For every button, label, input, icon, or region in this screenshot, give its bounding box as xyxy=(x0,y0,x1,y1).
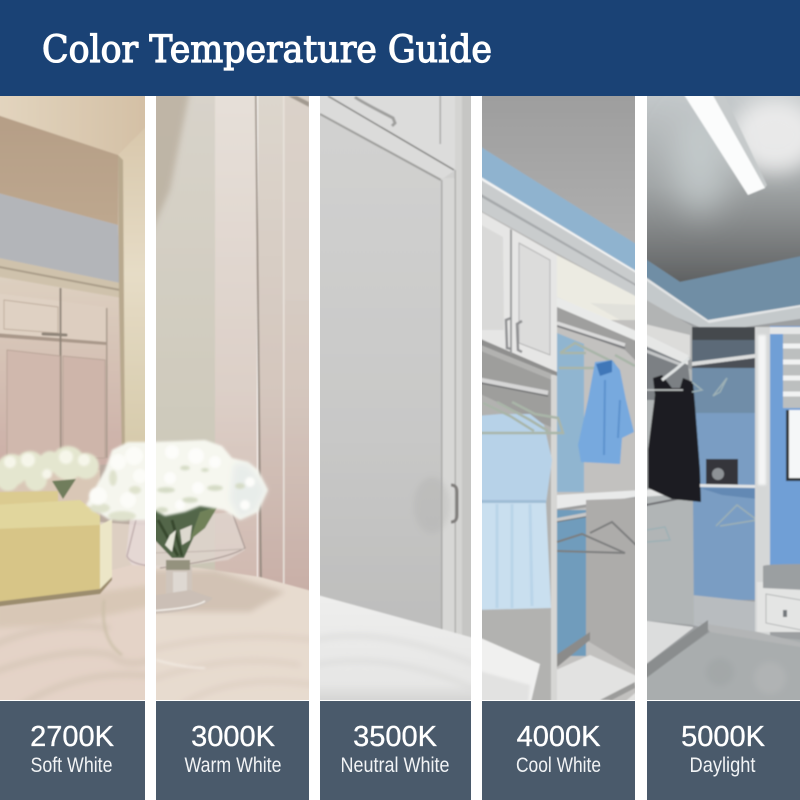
cream storage box xyxy=(0,491,112,607)
panel: 5000K daylight photo xyxy=(641,90,800,706)
ceiling with glow xyxy=(641,90,800,282)
panel: 3000K label: 3000K xyxy=(191,721,276,753)
panel: 3500K label xyxy=(320,701,471,800)
back wall xyxy=(692,368,758,640)
panel: 2700K label: 2700K xyxy=(30,721,115,753)
panel: 3000K label xyxy=(156,701,309,800)
marble table top xyxy=(0,460,151,706)
open shelving xyxy=(556,255,641,706)
title: Color Temperature Guide xyxy=(42,28,492,71)
panel: 3000K warm white photo xyxy=(150,90,315,706)
window seat bench xyxy=(757,564,800,632)
hangers on upper rod xyxy=(476,343,635,433)
hangers in back section xyxy=(647,378,757,542)
panel: 3500K label: Neutral White xyxy=(340,754,450,777)
panel: 2700K label: Soft White xyxy=(30,754,112,777)
white hydrangea, left part xyxy=(86,442,151,521)
lower left bay under cabinet xyxy=(482,352,558,700)
ceiling light fixture xyxy=(681,90,767,195)
panel: 4000K label: Cool White xyxy=(516,754,601,777)
pale blue dress xyxy=(476,414,552,610)
panel: 3500K neutral white photo xyxy=(314,90,477,706)
cabinet doors with handles xyxy=(476,209,557,376)
panel: 4000K label: 4000K xyxy=(517,721,601,753)
left closet section xyxy=(647,336,694,625)
white hydrangea, right part xyxy=(150,440,268,520)
marble table xyxy=(320,595,471,700)
panel: 2700K soft white photo xyxy=(0,90,151,706)
shelf with decorative box xyxy=(700,459,757,499)
panel: 2700K label xyxy=(0,701,145,800)
glass vase xyxy=(150,512,245,614)
blue shirt xyxy=(578,360,634,464)
lower door frame and stile xyxy=(420,96,471,636)
marble table xyxy=(156,567,309,700)
panel: 4000K label xyxy=(482,701,635,800)
upper walls and crown xyxy=(641,255,800,372)
panel: 3000K label: Warm White xyxy=(184,754,282,777)
upper cabinet door xyxy=(320,96,454,181)
window wall and blinds xyxy=(770,326,800,586)
panel: 5000K label xyxy=(647,701,800,800)
panel: 5000K label: 5000K xyxy=(681,721,766,753)
black dress on hanger xyxy=(641,358,701,502)
hangers on lower rod xyxy=(557,522,636,553)
grey carpet floor xyxy=(647,620,800,700)
marble table corner xyxy=(482,638,540,700)
back reflected flowers xyxy=(0,446,99,499)
bouquet stems and leaves xyxy=(156,504,217,559)
panel: 5000K label: Daylight xyxy=(690,754,756,777)
glass vase, left half xyxy=(126,518,145,566)
panel: 3500K label: 3500K xyxy=(353,721,438,753)
white column xyxy=(755,327,800,640)
header bar xyxy=(0,0,800,96)
panel: 4000K cool white photo xyxy=(476,90,641,706)
